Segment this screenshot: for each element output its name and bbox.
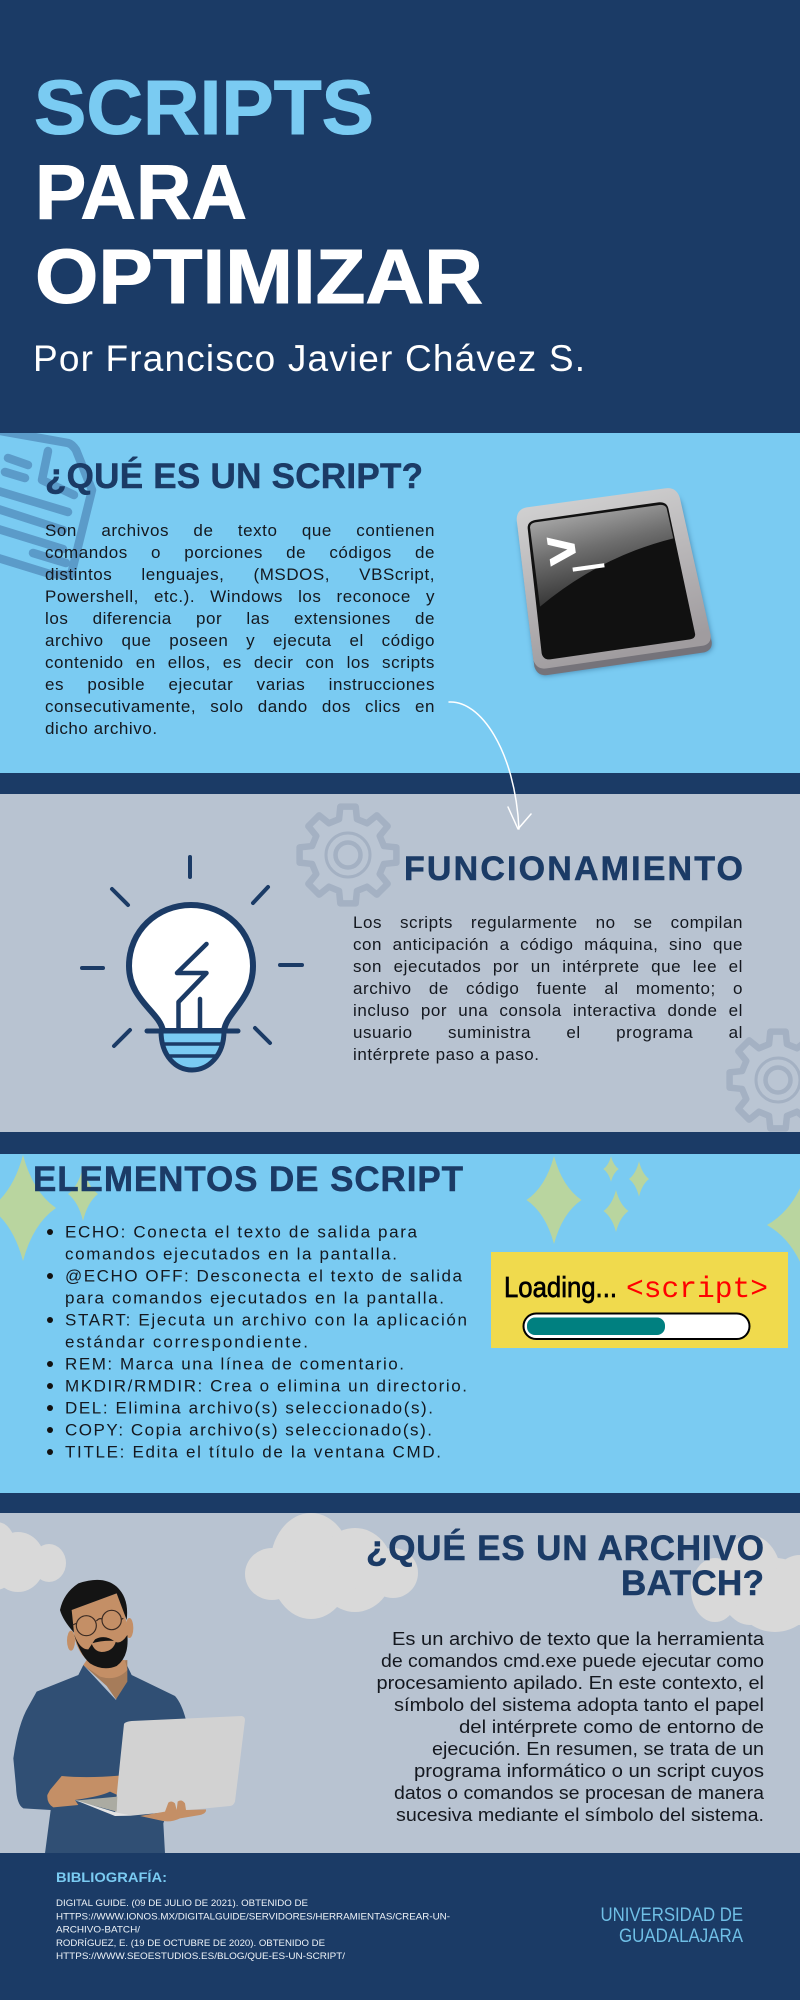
heading: BATCH? xyxy=(621,1564,764,1603)
text block: definition: archivo que poseen y ejecuta el código xyxy=(45,631,435,650)
list: commands: @ECHO OFF: Desconecta el texto de salida xyxy=(65,1266,463,1286)
loading banner: Loading... xyxy=(504,1272,617,1304)
list: commands: COPY: Copia archivo(s) seleccionado(s). xyxy=(65,1420,432,1440)
text block: definition xyxy=(45,521,435,738)
heading: ¿QUÉ ES UN SCRIPT? xyxy=(45,456,423,496)
text block: batch explanation: símbolo del sistema adopta tanto el papel xyxy=(394,1695,764,1715)
icon: document xyxy=(0,430,92,575)
text block: batch explanation: del intérprete como de entorno de xyxy=(459,1717,764,1737)
text block: batch explanation: sucesiva mediante el símbolo del sistema. xyxy=(396,1805,764,1825)
text block: definition: es posible ejecutar varias instrucciones xyxy=(45,675,435,694)
illustration: man with laptop xyxy=(13,1580,245,1853)
icon: gear bottom right xyxy=(730,1032,800,1128)
text block: definition: distintos lenguajes, (MSDOS, VBScript, xyxy=(45,565,435,584)
text: university xyxy=(600,1905,743,1947)
text block: references: HTTPS://WWW.SEOESTUDIOS.ES/BLOG/QUE-ES-UN-SCRIPT/ xyxy=(56,1951,345,1962)
panel: qué es un script xyxy=(0,433,800,773)
title xyxy=(34,65,483,320)
icon: light bulb xyxy=(82,857,302,1070)
text block: explanation: Los scripts regularmente no se compilan xyxy=(353,913,743,932)
text block: explanation: son ejecutados por un intérprete que lee el xyxy=(353,957,743,976)
heading xyxy=(366,1528,764,1603)
decoration: sparkles xyxy=(0,1155,800,1277)
list: commands: ECHO: Conecta el texto de salida para xyxy=(65,1222,418,1242)
subtitle: author: Por Francisco Javier Chávez S. xyxy=(33,338,585,379)
loading banner: <script> xyxy=(626,1273,768,1307)
glasses xyxy=(73,1610,123,1636)
text block: batch explanation: ejecución. En resumen, se trata de un xyxy=(432,1739,764,1759)
title: SCRIPTS xyxy=(34,65,374,151)
panel: footer xyxy=(0,1853,800,2000)
text block: explanation: incluso por una consola interactiva donde el xyxy=(353,1001,743,1020)
arrow xyxy=(448,701,532,830)
list: commands: DEL: Elimina archivo(s) seleccionado(s). xyxy=(65,1398,433,1418)
hair xyxy=(60,1580,127,1633)
loading banner xyxy=(491,1252,788,1348)
panel: funcionamiento xyxy=(0,794,800,1132)
text block: references: ARCHIVO-BATCH/ xyxy=(56,1925,140,1936)
beard xyxy=(74,1634,128,1668)
text block: references: HTTPS://WWW.IONOS.MX/DIGITALGUIDE/SERVIDORES/HERRAMIENTAS/CREAR-UN- xyxy=(56,1911,450,1922)
list: commands: para comandos ejecutados en la pantalla. xyxy=(65,1288,444,1308)
text block: explanation: intérprete paso a paso. xyxy=(353,1045,540,1064)
list: commands: estándar correspondiente. xyxy=(65,1332,308,1352)
panel: archivo batch xyxy=(0,1513,800,1853)
list: commands: TITLE: Edita el título de la ventana CMD. xyxy=(65,1442,441,1462)
mouth xyxy=(92,1641,116,1652)
text block: references: RODRÍGUEZ, E. (19 DE OCTUBRE DE 2020). OBTENIDO DE xyxy=(56,1938,325,1949)
panel: header xyxy=(0,0,800,433)
text block: definition: dicho archivo. xyxy=(45,719,158,738)
text block: definition: los diferencia por las extensiones de xyxy=(45,609,435,628)
list: commands: REM: Marca una línea de comentario. xyxy=(65,1354,404,1374)
text block: definition: contenido en ellos, es decir con los scripts xyxy=(45,653,435,672)
icon: gear top xyxy=(300,807,396,903)
text block: batch explanation: programa informático o un script cuyos xyxy=(414,1761,764,1781)
list: commands xyxy=(47,1222,467,1462)
icon text: prompt: >_ xyxy=(544,520,606,585)
text block: references: DIGITAL GUIDE. (09 DE JULIO DE 2021). OBTENIDO DE xyxy=(56,1898,308,1909)
text block: explanation xyxy=(353,913,743,1064)
laptop xyxy=(115,1716,245,1816)
text: university: UNIVERSIDAD DE xyxy=(600,1905,743,1926)
text block: explanation: archivo de código fuente al momento; o xyxy=(353,979,743,998)
text block: definition: Powershell, etc.). Windows los reconoce y xyxy=(45,587,435,606)
heading: ELEMENTOS DE SCRIPT xyxy=(33,1160,463,1199)
text block: references xyxy=(56,1898,450,1962)
text block: batch explanation: datos o comandos se procesan de manera xyxy=(394,1783,765,1803)
text block: batch explanation: procesamiento apilado. En este contexto, el xyxy=(376,1673,764,1693)
text block: definition: comandos o porciones de códigos de xyxy=(45,543,435,562)
text block: batch explanation xyxy=(376,1629,765,1825)
text block: batch explanation: de comandos cmd.exe puede ejecutar como xyxy=(381,1651,764,1671)
title: PARA xyxy=(35,150,247,236)
heading: FUNCIONAMIENTO xyxy=(404,850,743,888)
face xyxy=(71,1593,127,1667)
list: commands: comandos ejecutados en la pantalla. xyxy=(65,1244,397,1264)
text block: explanation: con anticipación a código máquina, sino que xyxy=(353,935,743,954)
neck xyxy=(83,1660,127,1699)
text: university: GUADALAJARA xyxy=(619,1926,743,1947)
shirt xyxy=(13,1663,186,1853)
heading: bibliografía: BIBLIOGRAFÍA: xyxy=(56,1869,167,1885)
decoration: clouds xyxy=(0,1513,800,1632)
text block: batch explanation: Es un archivo de texto que la herramienta xyxy=(392,1629,765,1649)
icon: terminal xyxy=(517,488,713,676)
text block: definition: Son archivos de texto que contienen xyxy=(45,521,435,540)
ears xyxy=(67,1631,75,1651)
panel: elementos de script xyxy=(0,1154,800,1493)
right hand xyxy=(140,1800,206,1821)
text block: definition: consecutivamente, solo dando dos clics en xyxy=(45,697,435,716)
text block: explanation: usuario suministra el programa al xyxy=(353,1023,743,1042)
heading: ¿QUÉ ES UN ARCHIVO xyxy=(366,1528,764,1568)
list: commands: MKDIR/RMDIR: Crea o elimina un directorio. xyxy=(65,1376,467,1396)
title: OPTIMIZAR xyxy=(35,234,483,320)
left arm hand xyxy=(47,1776,119,1807)
list: commands: START: Ejecuta un archivo con la aplicación xyxy=(65,1310,467,1330)
